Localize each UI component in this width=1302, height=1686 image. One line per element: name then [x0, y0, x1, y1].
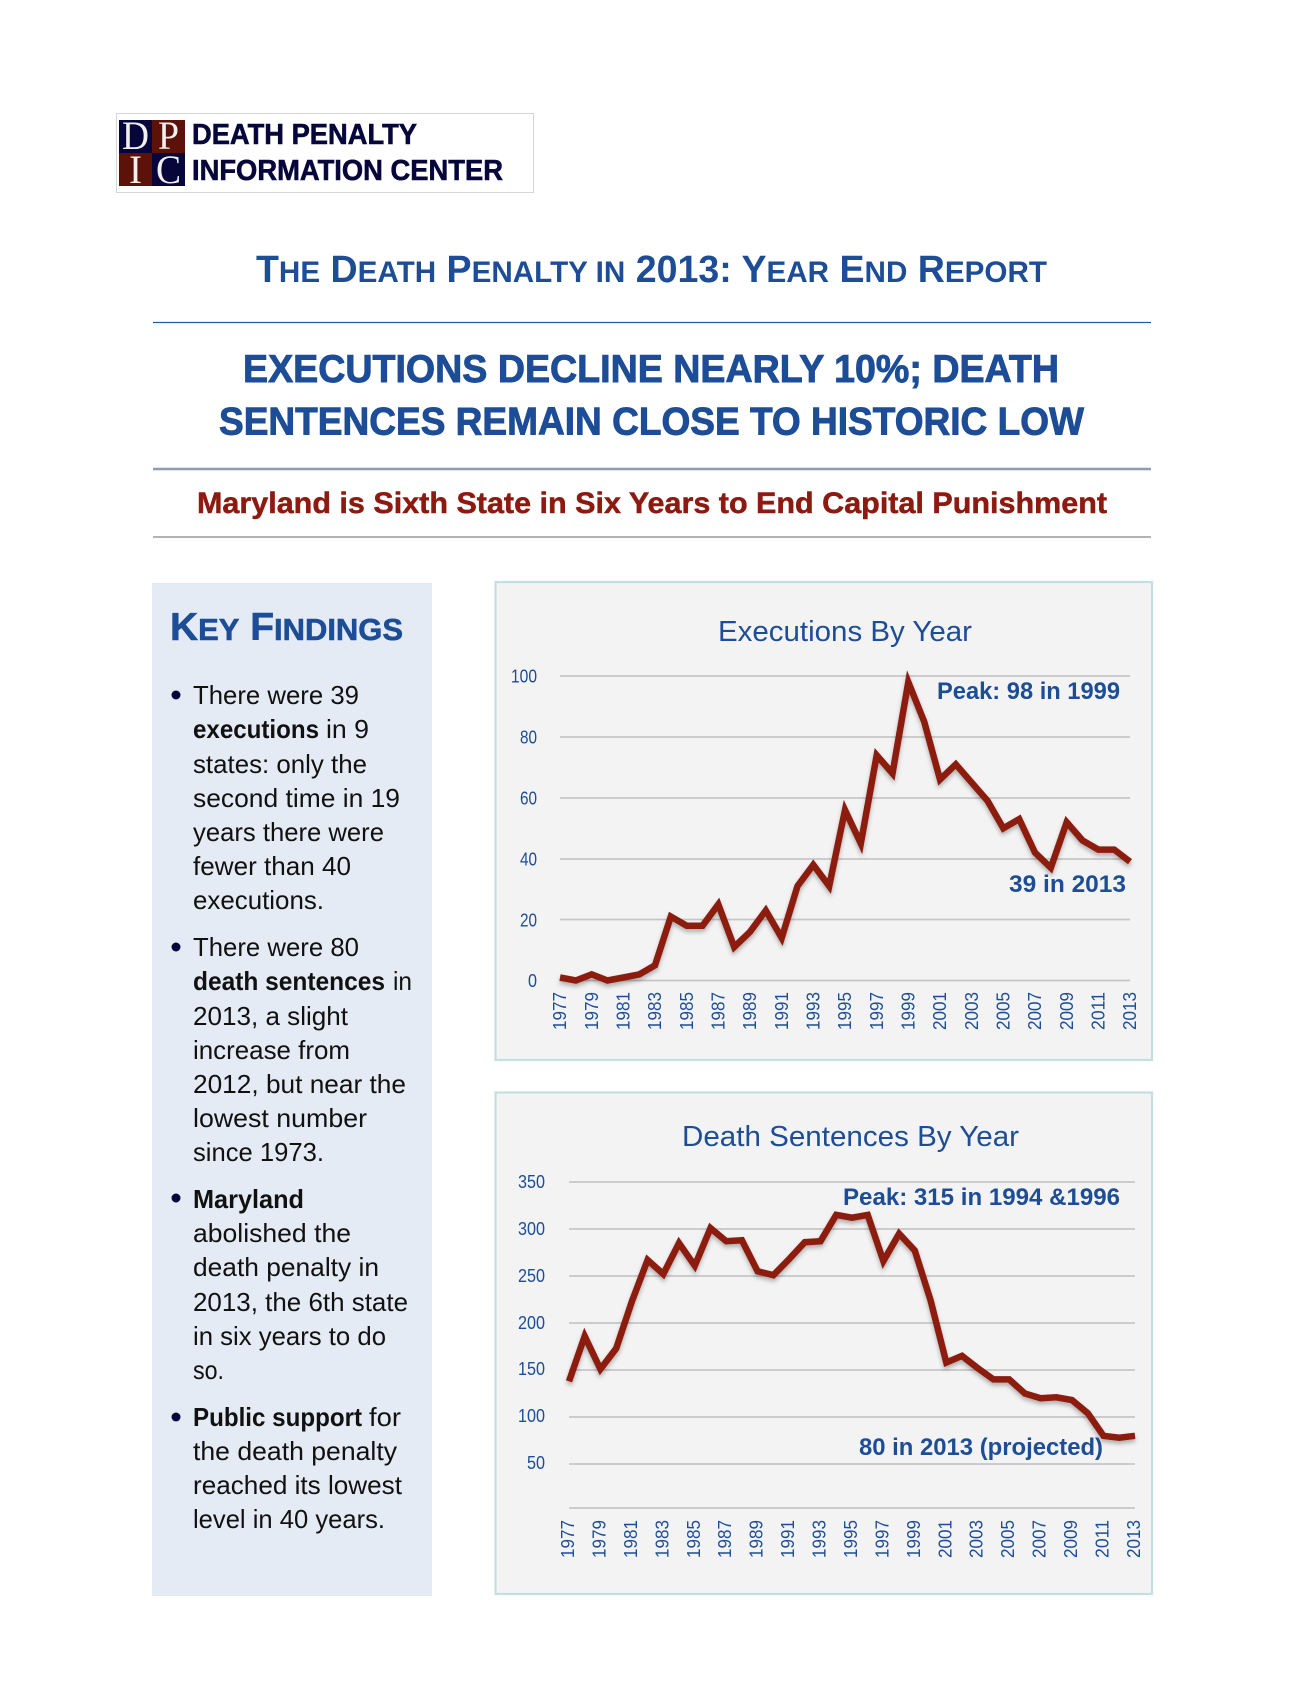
- finding: death sentences: 2013, a slight: [193, 1001, 349, 1031]
- panel: death sentences by year chart: [496, 1092, 1152, 1594]
- finding: death sentences: There were 80: [193, 932, 359, 962]
- callout: peak death sentences: Peak: 315 in 1994 &1996: [843, 1184, 1120, 1211]
- x axis labels: executions: 2001: [930, 992, 950, 1030]
- x axis labels: death sentences: 2007: [1030, 1520, 1050, 1558]
- heading: key findings: KEY FINDINGS: [170, 606, 403, 649]
- finding: executions: There were 39: [193, 680, 359, 710]
- y axis labels: executions: 40: [520, 850, 537, 870]
- finding: executions: in 9: [326, 714, 369, 744]
- y axis labels: death sentences: 100: [518, 1406, 545, 1426]
- x axis labels: executions: 1983: [645, 992, 665, 1030]
- finding: executions: [172, 680, 400, 915]
- x axis labels: death sentences: 1981: [621, 1520, 641, 1558]
- finding: death sentences: since 1973.: [193, 1137, 324, 1167]
- x axis labels: executions: 2003: [962, 992, 982, 1030]
- finding: executions: years there were: [193, 817, 384, 847]
- y axis labels: death sentences: 150: [518, 1359, 545, 1379]
- headline: EXECUTIONS DECLINE NEARLY 10%; DEATH: [243, 348, 1059, 391]
- x axis labels: death sentences: 1993: [810, 1520, 830, 1558]
- y axis labels: executions: 20: [520, 910, 537, 930]
- y axis labels: death sentences: 350: [518, 1172, 545, 1192]
- x axis labels: death sentences: 1995: [841, 1520, 861, 1558]
- line: executions by year: [560, 682, 1130, 980]
- y axis labels: death sentences: 50: [527, 1453, 545, 1473]
- logo: Death Penalty Information Center: DEATH PENALTY: [192, 119, 417, 151]
- logo: Death Penalty Information Center: C: [156, 147, 181, 192]
- finding: executions: fewer than 40: [193, 851, 351, 881]
- finding: death sentences: increase from: [193, 1035, 350, 1065]
- finding: death sentences: in: [393, 966, 412, 996]
- finding: Maryland: abolished the: [193, 1218, 351, 1248]
- y axis labels: executions: 80: [520, 728, 537, 748]
- x axis labels: death sentences: 1991: [778, 1520, 798, 1558]
- headline: [219, 348, 1084, 444]
- x axis labels: executions: 1993: [804, 992, 824, 1030]
- finding: death sentences: 2012, but near the: [193, 1069, 406, 1099]
- logo: Death Penalty Information Center: P: [158, 113, 179, 158]
- headline: SENTENCES REMAIN CLOSE TO HISTORIC LOW: [219, 400, 1084, 444]
- finding: death sentences: death sentences: [193, 966, 385, 996]
- title: THE DEATH PENALTY IN 2013: YEAR END REPORT: [256, 249, 1047, 291]
- x axis labels: death sentences: 2009: [1061, 1520, 1081, 1558]
- x axis labels: death sentences: 2013: [1124, 1520, 1144, 1558]
- finding: death sentences: lowest number: [193, 1103, 367, 1133]
- y axis labels: executions: 0: [528, 971, 537, 991]
- x axis labels: executions: 2013: [1120, 992, 1140, 1030]
- x axis labels: executions: 1991: [772, 992, 792, 1030]
- x axis labels: executions: 1989: [740, 992, 760, 1030]
- x axis labels: executions: 1995: [835, 992, 855, 1030]
- x axis labels: executions: 2007: [1025, 992, 1045, 1030]
- x axis labels: executions: 2011: [1088, 992, 1108, 1030]
- y axis labels: death sentences: [518, 1172, 545, 1473]
- y axis labels: death sentences: 200: [518, 1313, 545, 1333]
- x axis labels: death sentences: 1989: [747, 1520, 767, 1558]
- x axis labels: executions: 1977: [550, 992, 570, 1030]
- callout: 2013 death sentences: 80 in 2013 (projected): [859, 1434, 1103, 1461]
- logo: Death Penalty Information Center: D: [122, 113, 149, 158]
- y axis labels: death sentences: 300: [518, 1219, 545, 1239]
- finding: Maryland: in six years to do: [193, 1321, 386, 1351]
- finding: Maryland: so.: [193, 1355, 224, 1385]
- x axis labels: executions: 1979: [582, 992, 602, 1030]
- panel: key findings: [152, 583, 432, 1596]
- y axis labels: executions: 100: [511, 666, 537, 686]
- logo: Death Penalty Information Center: INFORMATION CENTER: [192, 155, 503, 187]
- subheading: Maryland is Sixth State in Six Years to End Capital Punishment: [197, 487, 1107, 520]
- chart title: death sentences: Death Sentences By Year: [682, 1121, 1019, 1153]
- x axis labels: executions: 1999: [898, 992, 918, 1030]
- x axis labels: death sentences: [558, 1520, 1144, 1558]
- x axis labels: executions: 2005: [994, 992, 1014, 1030]
- x axis labels: death sentences: 2003: [967, 1520, 987, 1558]
- x axis labels: death sentences: 2005: [998, 1520, 1018, 1558]
- finding: Maryland: [172, 1184, 408, 1385]
- x axis labels: death sentences: 1985: [684, 1520, 704, 1558]
- logo: Death Penalty Information Center: [116, 113, 534, 192]
- x axis labels: death sentences: 1979: [589, 1520, 609, 1558]
- finding: public support: reached its lowest: [193, 1470, 403, 1500]
- callout: 2013 executions: 39 in 2013: [1009, 871, 1126, 898]
- x axis labels: death sentences: 2011: [1092, 1520, 1112, 1558]
- x axis labels: death sentences: 1977: [558, 1520, 578, 1558]
- x axis labels: death sentences: 1983: [652, 1520, 672, 1558]
- panel: executions by year chart: [496, 582, 1152, 1060]
- finding: executions: executions: [193, 714, 319, 744]
- x axis labels: executions: 2009: [1057, 992, 1077, 1030]
- y axis labels: executions: [511, 666, 537, 991]
- chart title: executions: Executions By Year: [718, 616, 972, 648]
- x axis labels: death sentences: 1987: [715, 1520, 735, 1558]
- x axis labels: executions: 1987: [708, 992, 728, 1030]
- finding: Maryland: 2013, the 6th state: [193, 1287, 408, 1317]
- finding: executions: executions.: [193, 885, 324, 915]
- y axis labels: death sentences: 250: [518, 1266, 545, 1286]
- x axis labels: executions: 1997: [867, 992, 887, 1030]
- line: death sentences by year: [569, 1215, 1135, 1438]
- y axis labels: executions: 60: [520, 788, 537, 808]
- finding: executions: second time in 19: [193, 783, 400, 813]
- x axis labels: executions: [550, 992, 1140, 1030]
- finding: public support: for: [369, 1402, 401, 1432]
- x axis labels: executions: 1985: [677, 992, 697, 1030]
- finding: executions: states: only the: [193, 749, 367, 779]
- callout: peak executions: Peak: 98 in 1999: [937, 678, 1120, 705]
- x axis labels: executions: 1981: [614, 992, 634, 1030]
- finding: Maryland: Maryland: [193, 1184, 304, 1214]
- finding: public support: Public support: [193, 1402, 362, 1432]
- finding: death sentences: [172, 932, 412, 1167]
- x axis labels: death sentences: 2001: [935, 1520, 955, 1558]
- x axis labels: death sentences: 1999: [904, 1520, 924, 1558]
- finding: public support: [172, 1402, 403, 1534]
- logo: Death Penalty Information Center: I: [129, 147, 142, 192]
- finding: public support: the death penalty: [193, 1436, 397, 1466]
- finding: public support: level in 40 years.: [193, 1504, 385, 1534]
- finding: Maryland: death penalty in: [193, 1252, 379, 1282]
- x axis labels: death sentences: 1997: [872, 1520, 892, 1558]
